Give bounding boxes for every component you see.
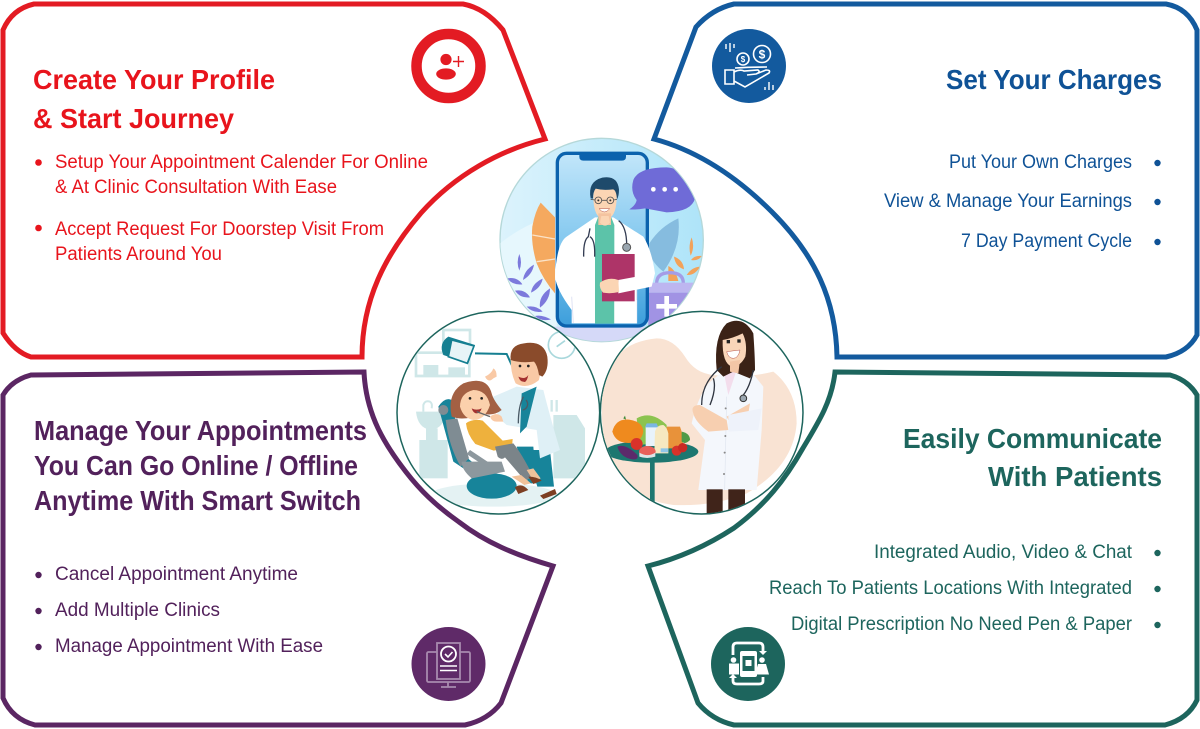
bullet list: appointments: Add Multiple Clinics <box>55 600 220 621</box>
heading: create your profile <box>33 64 275 134</box>
heading: easily communicate: With Patients <box>988 461 1162 492</box>
dentist head <box>510 359 540 386</box>
arms <box>692 405 728 432</box>
lamp <box>442 337 475 363</box>
bullet list: profile <box>35 152 428 265</box>
illustration: nutritionist with food <box>600 311 803 519</box>
bullet list: charges: 7 Day Payment Cycle <box>961 231 1132 252</box>
speech bubble <box>629 167 695 212</box>
background shelves and sink <box>416 330 585 507</box>
food <box>637 415 667 445</box>
stethoscope <box>702 367 753 405</box>
phone <box>557 153 647 326</box>
heading: easily communicate <box>903 423 1162 492</box>
heading: manage your appointments: Anytime With Smart Switch <box>34 485 361 516</box>
face <box>593 188 617 217</box>
bullet list: profile: Patients Around You <box>55 244 222 265</box>
icon: phone with doctor and patient <box>711 627 785 701</box>
bullet list: profile: Setup Your Appointment Calender For Online <box>55 152 428 173</box>
heading: manage your appointments: Manage Your Appointments <box>34 415 367 446</box>
illustration: doctor on phone <box>500 138 705 343</box>
stethoscope <box>584 221 627 257</box>
blue panel outline <box>654 4 1197 357</box>
icon: add user <box>416 34 480 98</box>
icon: devices with check <box>412 627 486 701</box>
scrubs <box>595 225 614 324</box>
green panel outline <box>648 372 1197 725</box>
dentist coat and legs <box>517 447 554 487</box>
heading: set your charges: Set Your Charges <box>946 64 1162 95</box>
orange leaf <box>532 203 555 293</box>
medical kit <box>657 273 683 283</box>
bullet list: appointments: Cancel Appointment Anytime <box>55 564 298 585</box>
bottom highlight <box>554 326 646 342</box>
table <box>650 460 655 503</box>
panel: create your profile <box>3 4 545 357</box>
coat <box>555 217 655 323</box>
heading: manage your appointments <box>34 415 367 516</box>
bullet list: charges: Put Your Own Charges <box>949 152 1132 173</box>
bullet list: communicate: Integrated Audio, Video & Chat <box>874 542 1133 563</box>
bullet list: appointments: Manage Appointment With Ease <box>55 636 323 657</box>
bullet list: profile: Accept Request For Doorstep Visit From <box>55 219 384 240</box>
red panel outline <box>3 4 545 357</box>
icon: hand with coins <box>712 29 786 103</box>
bullet list: charges <box>884 152 1161 252</box>
purple plant <box>507 254 551 320</box>
peach backdrop <box>602 338 797 505</box>
purple panel outline <box>3 372 553 725</box>
bullet list: appointments <box>35 564 323 657</box>
hair and face <box>716 321 755 378</box>
bullet list: profile: & At Clinic Consultation With Ease <box>55 177 337 198</box>
patient <box>466 420 513 451</box>
heading: easily communicate: Easily Communicate <box>903 423 1162 454</box>
doctor coat <box>692 362 763 490</box>
bullet list: communicate <box>769 542 1161 635</box>
bullet list: communicate: Digital Prescription No Need Pen & Paper <box>791 614 1133 635</box>
illustration: dentist with patient <box>397 311 600 514</box>
panel: manage your appointments <box>3 372 553 725</box>
heading: create your profile: & Start Journey <box>33 103 234 134</box>
heading: manage your appointments: You Can Go Online / Offline <box>34 450 358 481</box>
bullet list: communicate: Reach To Patients Locations With Integrated <box>769 578 1132 599</box>
panel: easily communicate <box>648 372 1197 725</box>
bullet list: charges: View & Manage Your Earnings <box>884 191 1132 212</box>
legs <box>706 489 723 514</box>
orange plant <box>668 237 702 281</box>
chair <box>467 473 517 499</box>
heading: create your profile: Create Your Profile <box>33 64 275 95</box>
clipboard <box>602 254 635 301</box>
blue leaf <box>649 218 679 272</box>
panel: set your charges <box>654 4 1197 357</box>
icon: hand with coins: $ <box>759 48 766 62</box>
icon: hand with coins: $ <box>741 55 746 64</box>
